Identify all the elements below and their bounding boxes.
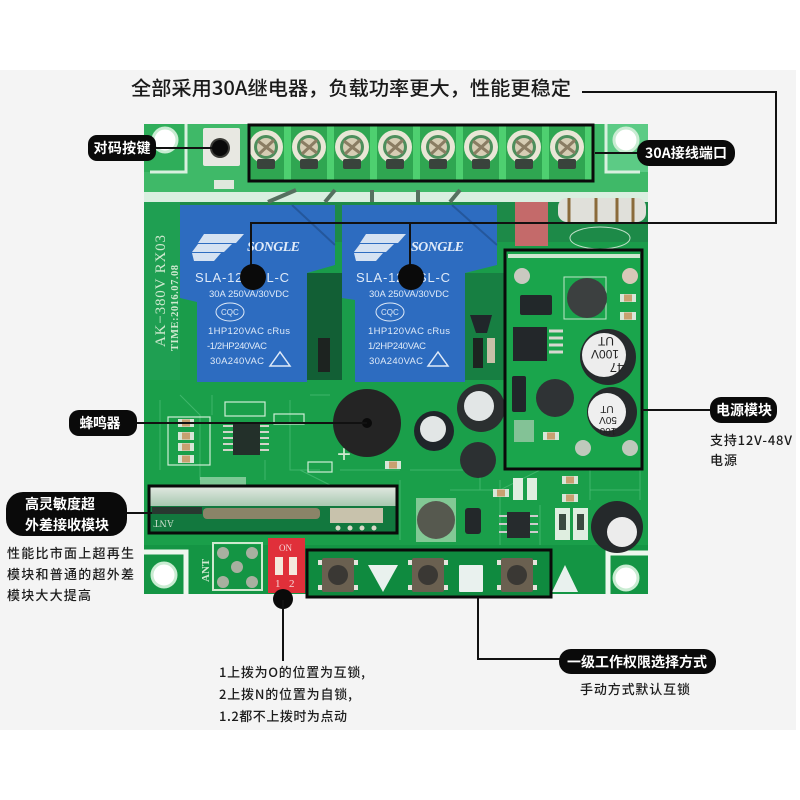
receiver note: 性能比市面上超再生 bbox=[7, 543, 134, 562]
right relay: 1HP120VAC cRus bbox=[368, 326, 450, 337]
terminal block bbox=[248, 124, 594, 182]
power note bbox=[710, 430, 792, 469]
mode note: 手动方式默认互锁 bbox=[580, 679, 690, 698]
callout: receiver module bbox=[6, 492, 152, 604]
power module: 100V bbox=[591, 347, 619, 361]
callout: work mode: 一级工作权限选择方式 bbox=[567, 652, 707, 672]
title: 全部采用30A继电器，负载功率更大，性能更稳定 bbox=[131, 72, 571, 101]
electrolytic capacitors bbox=[414, 384, 643, 553]
callout: 30A terminal port bbox=[595, 140, 735, 166]
left relay: SONGLE bbox=[247, 240, 300, 255]
callout: receiver module: 外差接收模块 bbox=[25, 515, 109, 535]
board silk text bbox=[153, 235, 351, 582]
receiver note bbox=[7, 543, 134, 604]
callout: buzzer: 蜂鸣器 bbox=[80, 413, 120, 433]
left relay: -1/2HP240VAC bbox=[207, 341, 267, 352]
callout: pairing button: 对码按键 bbox=[94, 138, 150, 158]
DIP note: 1.2都不上拨时为点动 bbox=[219, 706, 347, 725]
leader: relay to title bbox=[240, 92, 776, 290]
board silk text: TIME:2016.07.08 bbox=[170, 265, 181, 351]
callout: power module bbox=[642, 397, 792, 469]
right relay bbox=[342, 205, 497, 382]
highlight: terminal block bbox=[249, 125, 593, 181]
callout: buzzer bbox=[69, 410, 367, 436]
controller chip bbox=[168, 402, 401, 485]
DIP switch: 1 bbox=[275, 578, 280, 590]
circuit board bbox=[144, 124, 648, 596]
left relay: 1HP120VAC cRus bbox=[208, 326, 290, 337]
power module: 100 bbox=[599, 425, 616, 436]
power module: UT bbox=[597, 334, 614, 348]
callout: power module: 电源模块 bbox=[716, 400, 772, 420]
callout: work mode bbox=[478, 597, 716, 698]
DIP note: 2上拨N的位置为自锁, bbox=[219, 684, 352, 703]
dark components between relays bbox=[307, 273, 505, 380]
right relay: SONGLE bbox=[411, 240, 464, 255]
DIP switch: ON bbox=[279, 543, 292, 553]
power note: 电源 bbox=[710, 450, 737, 469]
right relay: 30A 250VA/30VDC bbox=[369, 289, 449, 300]
DIP switch bbox=[268, 538, 305, 593]
left relay: 30A240VAC bbox=[210, 356, 264, 367]
callout: 30A terminal port: 30A接线端口 bbox=[645, 143, 727, 163]
left relay: SLA-12V SL-C bbox=[195, 270, 289, 285]
power resistor bbox=[515, 198, 646, 249]
DIP switch: 2 bbox=[289, 578, 294, 590]
DIP note bbox=[219, 662, 365, 725]
pairing button hardware bbox=[203, 128, 240, 189]
left relay: CQC bbox=[221, 308, 239, 317]
highlight: receiver module bbox=[149, 486, 397, 533]
power module: UT bbox=[600, 403, 614, 414]
right relay: 1/2HP240VAC bbox=[368, 341, 426, 352]
lower SMD components bbox=[416, 498, 588, 542]
DIP note: 1上拨为O的位置为互锁, bbox=[219, 662, 365, 681]
receiver module bbox=[149, 486, 396, 534]
callout: receiver module: 高灵敏度超 bbox=[25, 494, 95, 514]
board silk text: + bbox=[337, 441, 351, 468]
manual buttons and arrows bbox=[307, 549, 578, 596]
right relay: 30A240VAC bbox=[369, 356, 423, 367]
receiver note: 模块和普通的超外差 bbox=[7, 564, 134, 583]
callout: pairing button bbox=[88, 135, 228, 161]
antenna pads bbox=[213, 543, 262, 590]
board silk text: AK−380V RX03 bbox=[153, 235, 169, 347]
power module: 47 bbox=[610, 360, 624, 375]
PCB traces bbox=[160, 190, 640, 545]
buzzer bbox=[333, 389, 401, 457]
left relay: 30A 250VA/30VDC bbox=[209, 289, 289, 300]
corner mount holes bbox=[144, 124, 648, 594]
right relay: CQC bbox=[381, 308, 399, 317]
receiver note: 模块大大提高 bbox=[7, 585, 91, 604]
power note: 支持12V-48V bbox=[710, 430, 792, 449]
right relay: SLA-12V SL-C bbox=[356, 270, 450, 285]
left relay bbox=[180, 205, 335, 382]
highlight: buttons bbox=[307, 550, 551, 597]
board silk text: ANT bbox=[200, 558, 212, 582]
highlight: power module bbox=[505, 250, 642, 469]
receiver module: ANT bbox=[153, 517, 174, 528]
callout: DIP switch bbox=[219, 589, 365, 725]
power module bbox=[505, 250, 643, 470]
power module: 50V bbox=[599, 414, 617, 425]
